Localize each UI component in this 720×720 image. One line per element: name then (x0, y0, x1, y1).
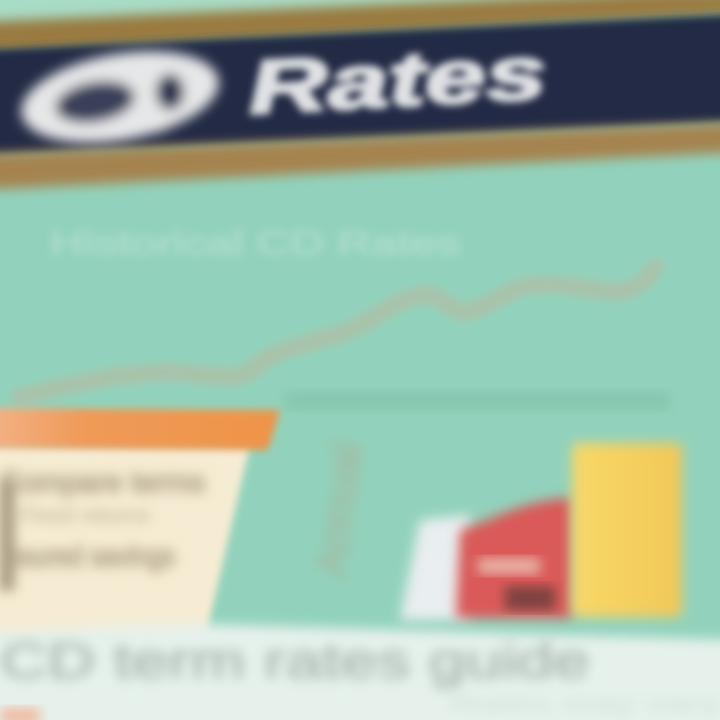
header banner (0, 0, 720, 190)
panel text lines: Insured savings (0, 540, 175, 573)
chart baseline (285, 392, 670, 410)
footer accent (0, 708, 40, 720)
panel text lines: Fixed returns (20, 505, 150, 527)
bar chart (400, 443, 682, 620)
vertical axis label: Annual (306, 439, 371, 579)
bar: red (456, 498, 572, 618)
bar: yellow (572, 443, 682, 617)
panel heading bar (0, 408, 280, 450)
chart subtitle: Historical CD Rates (50, 225, 460, 261)
panel text lines (0, 466, 205, 590)
bar: white (400, 515, 470, 620)
panel: notes (0, 408, 280, 640)
footer text: CD term rates guide (0, 633, 590, 689)
banner title: Rates (246, 30, 548, 131)
line chart (20, 268, 655, 397)
footer strip (0, 624, 720, 720)
footer fine print: Rates may vary (450, 691, 720, 718)
panel body (0, 445, 250, 640)
banner logo (14, 37, 226, 157)
panel text lines: Compare terms (0, 466, 205, 499)
